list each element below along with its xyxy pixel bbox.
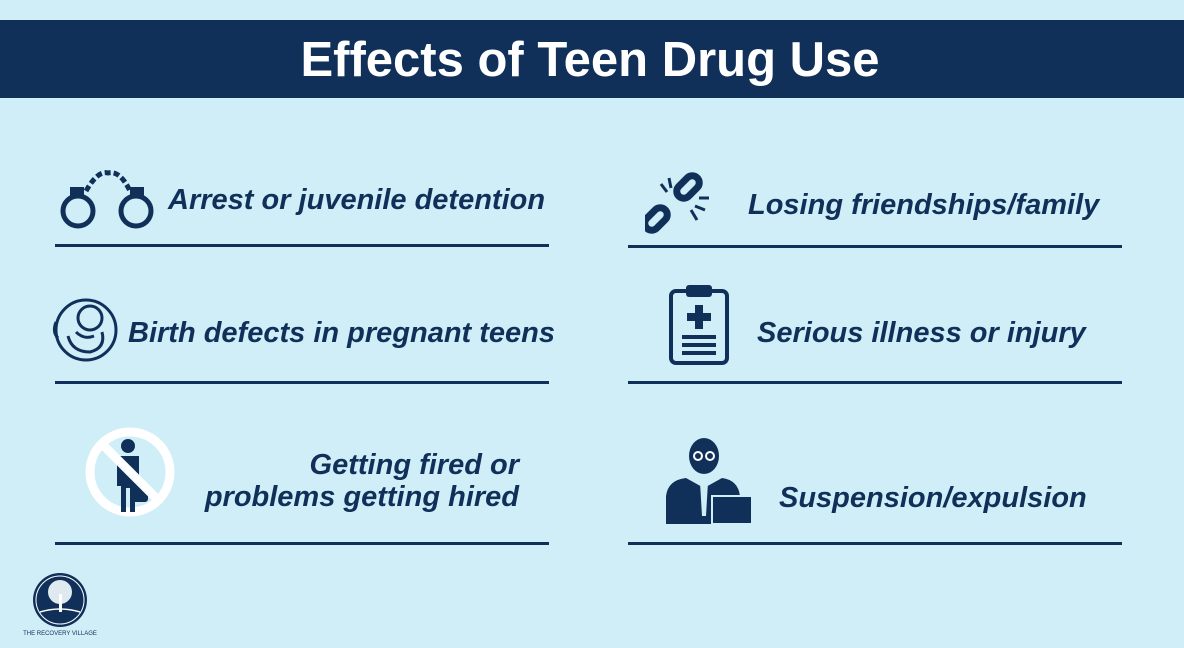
text: losing friendships: Losing friendships/family: [748, 189, 1099, 221]
text: getting fired: Getting fired or: [310, 449, 519, 481]
logo: [23, 573, 97, 637]
text: getting fired: [204, 449, 520, 513]
text: birth defects: Birth defects in pregnant teens: [128, 317, 555, 349]
icon: no employment: [86, 428, 174, 516]
icon: principal: [666, 438, 751, 524]
header banner: [0, 20, 1184, 98]
icon: clipboard: [669, 285, 729, 365]
logo: THE RECOVERY VILLAGE: [23, 631, 97, 637]
text: getting fired: problems getting hired: [205, 481, 519, 513]
text: serious illness: Serious illness or injury: [757, 317, 1086, 349]
text: arrest: Arrest or juvenile detention: [168, 184, 545, 216]
icon: broken chain: [645, 172, 709, 234]
text: suspension: Suspension/expulsion: [779, 482, 1087, 514]
title: Effects of Teen Drug Use: [300, 33, 880, 87]
icon: handcuffs: [60, 170, 154, 228]
icon: fetus: [52, 298, 118, 362]
